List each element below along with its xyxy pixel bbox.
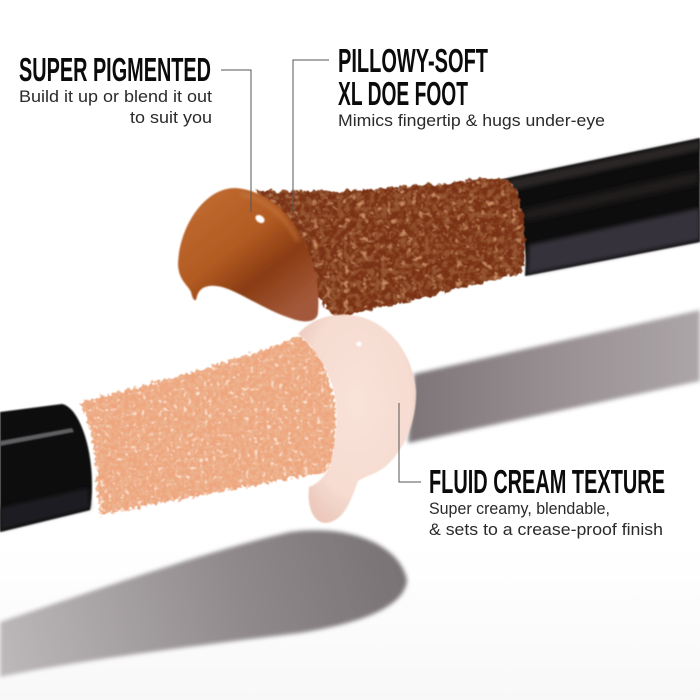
shadow: upper right brush bbox=[408, 310, 700, 443]
callout: fluid cream: & sets to a crease-proof finish bbox=[429, 520, 663, 539]
leader line bbox=[221, 70, 251, 212]
applicator: light shade bbox=[0, 315, 416, 532]
sponge tip bbox=[80, 336, 336, 515]
gloss edge bbox=[240, 194, 298, 241]
description: Build it up or blend it out bbox=[19, 87, 212, 106]
leader line bbox=[293, 60, 329, 212]
heading: SUPER PIGMENTED bbox=[19, 51, 211, 88]
callout: super pigmented bbox=[19, 51, 251, 212]
handle bbox=[498, 138, 700, 276]
description: Super creamy, blendable, bbox=[429, 499, 610, 518]
callout: pillowy-soft: XL DOE FOOT bbox=[338, 75, 468, 112]
cream bbox=[178, 188, 318, 321]
handle bbox=[0, 404, 92, 532]
callout: super pigmented: to suit you bbox=[130, 108, 212, 127]
sponge tip bbox=[256, 178, 525, 316]
description: Mimics fingertip & hugs under-eye bbox=[338, 111, 605, 130]
highlight bbox=[254, 213, 266, 225]
applicator: deep shade bbox=[178, 138, 700, 321]
shadow: lower left brush bbox=[0, 530, 407, 677]
callout: fluid cream bbox=[399, 403, 665, 539]
highlight bbox=[356, 342, 362, 346]
leader line bbox=[399, 403, 421, 482]
cream bbox=[298, 315, 416, 523]
callout: pillowy-soft bbox=[293, 42, 605, 212]
heading: PILLOWY-SOFT bbox=[338, 42, 488, 79]
